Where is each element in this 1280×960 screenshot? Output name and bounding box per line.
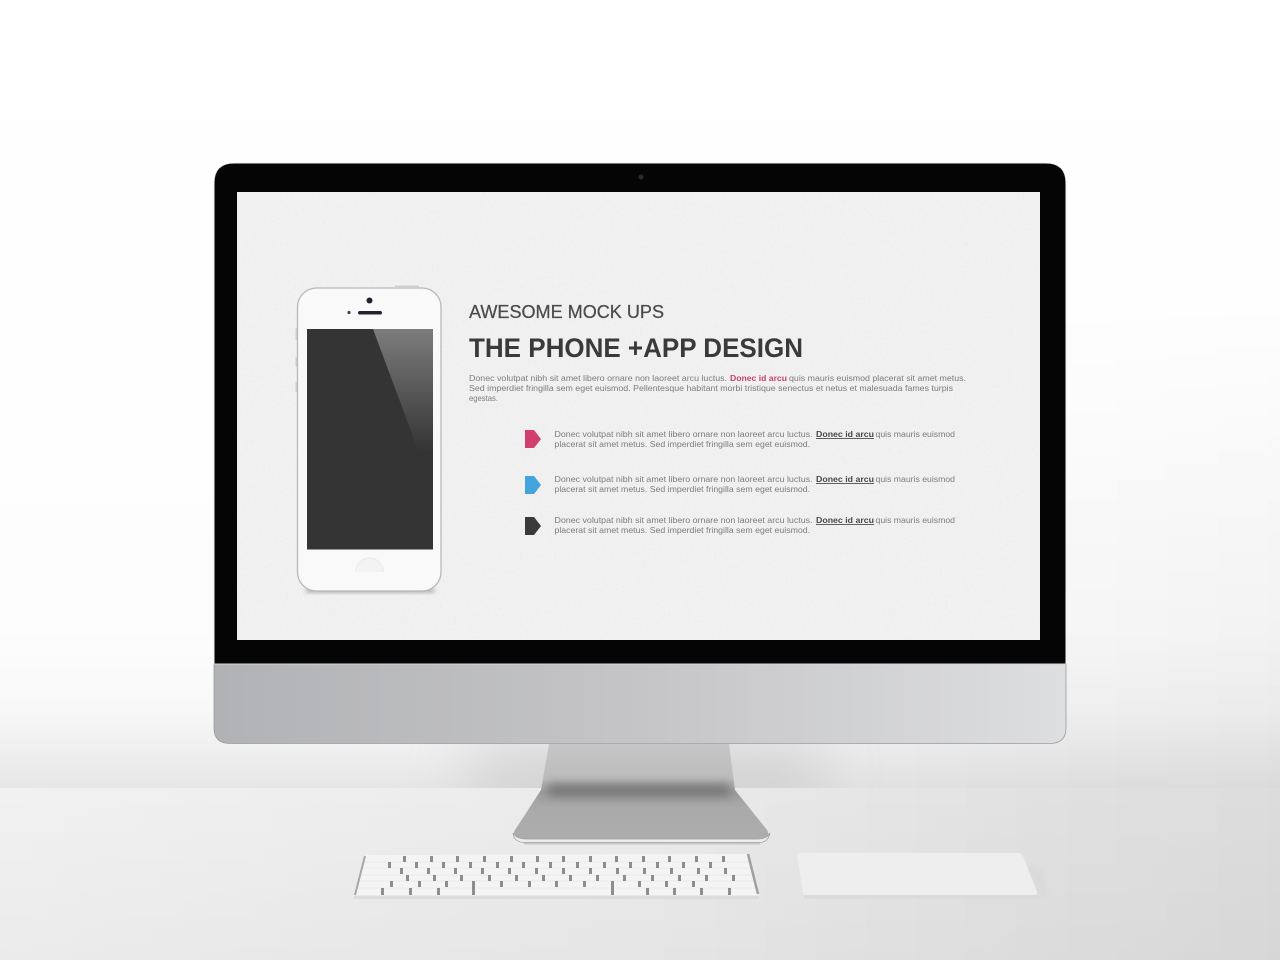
list item 1 <box>525 429 955 449</box>
stand base lower edge <box>524 843 760 844</box>
keyboard key gaps <box>381 856 735 895</box>
stand dark reflection band <box>548 784 730 796</box>
phone screen <box>307 329 433 550</box>
keyboard <box>354 854 759 899</box>
phone shadow <box>306 589 434 592</box>
icon: blue tag arrow <box>525 476 541 494</box>
intro paragraph <box>469 373 966 403</box>
webcam <box>638 174 644 180</box>
phone speaker <box>358 311 382 314</box>
phone home button <box>356 558 384 572</box>
trackpad <box>797 853 1048 898</box>
icon: dark tag arrow <box>525 517 541 535</box>
subtitle: AWESOME MOCK UPS <box>469 302 664 322</box>
keyboard front edge <box>354 896 759 899</box>
item 1 text: quis mauris euismod <box>876 429 955 439</box>
phone side buttons <box>296 286 419 392</box>
item 1 text: placerat sit amet metus. Sed imperdiet fringilla sem eget euismod. <box>554 439 810 449</box>
list item 2 <box>525 474 955 494</box>
right side falloff <box>1066 561 1280 960</box>
monitor aluminium chin <box>214 664 1066 744</box>
item 2 text: placerat sit amet metus. Sed imperdiet fringilla sem eget euismod. <box>554 484 810 494</box>
chin highlight <box>214 664 1066 665</box>
trackpad surface <box>797 853 1037 895</box>
monitor stand <box>513 744 770 844</box>
phone mockup <box>296 286 441 592</box>
item 1 text: Donec volutpat nibh sit amet libero ornare non laoreet arcu luctus. <box>554 429 812 439</box>
desk lower falloff <box>0 788 1280 960</box>
intro paragraph: Donec volutpat nibh sit amet libero ornare non laoreet arcu luctus. <box>469 373 727 383</box>
item 3 text: Donec id arcu <box>816 515 874 525</box>
shadow behind monitor stand <box>466 744 822 788</box>
background: desk <box>0 788 1280 960</box>
list item 3 <box>525 515 955 535</box>
phone screen glare <box>373 329 433 450</box>
item 3 text: quis mauris euismod <box>876 515 955 525</box>
keyboard body <box>354 854 759 899</box>
item 1 text: Donec id arcu <box>816 429 874 439</box>
item 2 text <box>554 474 955 494</box>
intro paragraph: Donec id arcu <box>730 373 787 383</box>
icon: pink tag arrow <box>525 430 541 448</box>
intro paragraph: Sed imperdiet fringilla sem eget euismod. Pellentesque habitant morbi tristique senectus et netus et malesuada fames turpis <box>469 383 953 393</box>
monitor black bezel <box>214 163 1066 664</box>
trackpad front edge <box>804 895 1038 898</box>
trackpad cast shadow <box>1026 864 1048 897</box>
item 1 text <box>554 429 955 449</box>
phone body <box>298 288 441 591</box>
keyboard row lines <box>356 862 757 888</box>
phone sensor <box>347 311 351 314</box>
phone camera <box>366 298 372 304</box>
screen <box>237 192 1040 640</box>
item 3 text <box>554 515 955 535</box>
intro paragraph: egestas. <box>469 393 498 403</box>
item 3 text: Donec volutpat nibh sit amet libero ornare non laoreet arcu luctus. <box>554 515 812 525</box>
item 2 text: quis mauris euismod <box>876 474 955 484</box>
item 2 text: Donec volutpat nibh sit amet libero ornare non laoreet arcu luctus. <box>554 474 812 484</box>
stand base rim <box>513 833 770 842</box>
item 2 text: Donec id arcu <box>816 474 874 484</box>
item 3 text: placerat sit amet metus. Sed imperdiet fringilla sem eget euismod. <box>554 525 810 535</box>
keyboard side edges <box>355 856 365 895</box>
stand body <box>513 744 769 840</box>
monitor <box>214 163 1066 744</box>
intro paragraph: quis mauris euismod placerat sit amet metus. <box>789 373 966 383</box>
title: THE PHONE +APP DESIGN <box>469 333 803 363</box>
screen paper texture <box>237 192 1040 640</box>
